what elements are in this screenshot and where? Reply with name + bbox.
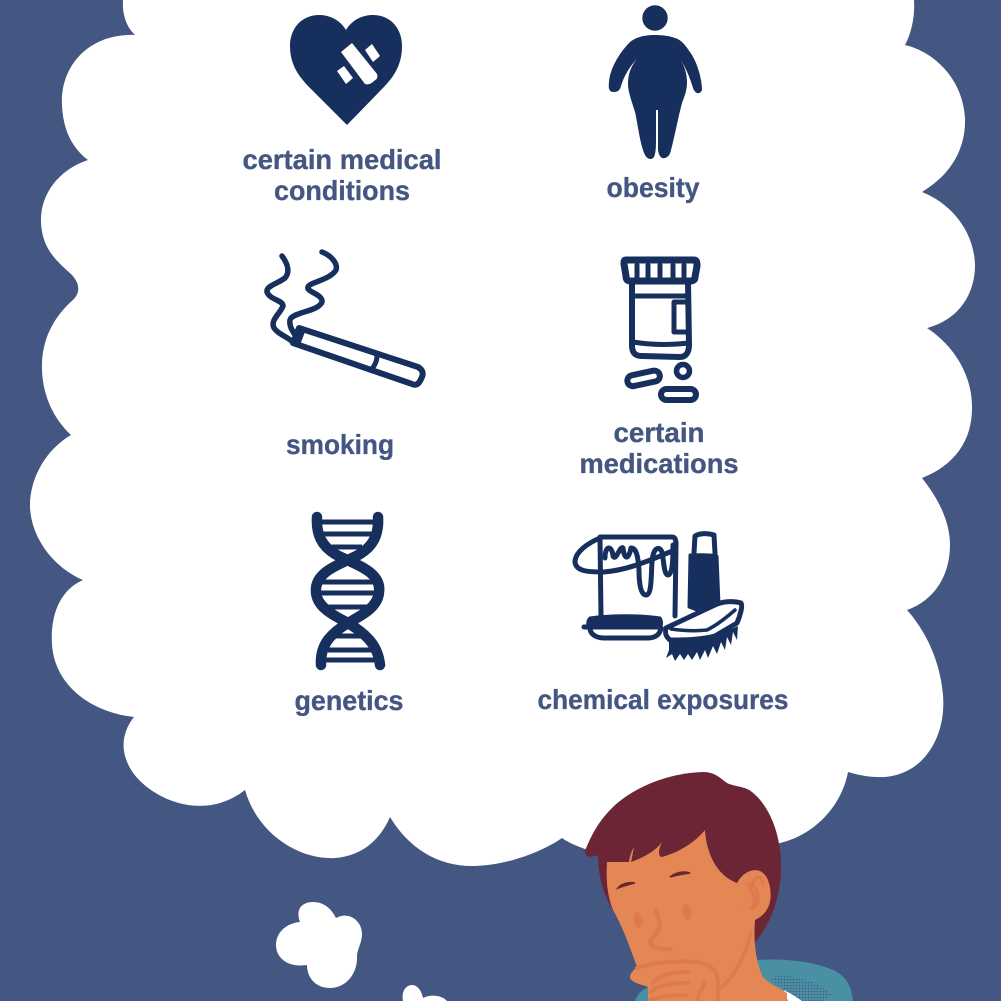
person bbox=[585, 772, 853, 1001]
label: certain medications: certain bbox=[614, 417, 704, 448]
label: certain medical conditions: conditions bbox=[274, 175, 410, 206]
label: chemical exposures: chemical exposures bbox=[538, 684, 788, 715]
icon: dna bbox=[316, 517, 380, 665]
eyebrows bbox=[618, 872, 690, 888]
label: genetics: genetics bbox=[294, 685, 404, 716]
collar bbox=[784, 990, 802, 1001]
hand bbox=[637, 961, 718, 1001]
label: smoking: smoking bbox=[286, 429, 394, 460]
icon: cigarette bbox=[267, 252, 423, 385]
label: certain medical conditions: certain medical bbox=[242, 144, 442, 175]
neck and face bbox=[607, 830, 787, 1001]
small thought bubble bbox=[276, 902, 362, 988]
icon: chemicals bbox=[575, 534, 742, 661]
icon: pill bottle bbox=[624, 260, 697, 400]
hair bbox=[585, 772, 781, 942]
ear bbox=[737, 870, 771, 920]
cheek marks bbox=[632, 911, 644, 929]
smallest thought bubble bbox=[403, 985, 447, 1001]
label: obesity: obesity bbox=[606, 172, 700, 203]
icon: heart bbox=[290, 15, 402, 125]
nose and jaw lines bbox=[651, 911, 670, 949]
label: certain medications: medications bbox=[580, 448, 738, 479]
icon: obesity bbox=[609, 5, 702, 159]
jacket bbox=[635, 959, 853, 1001]
